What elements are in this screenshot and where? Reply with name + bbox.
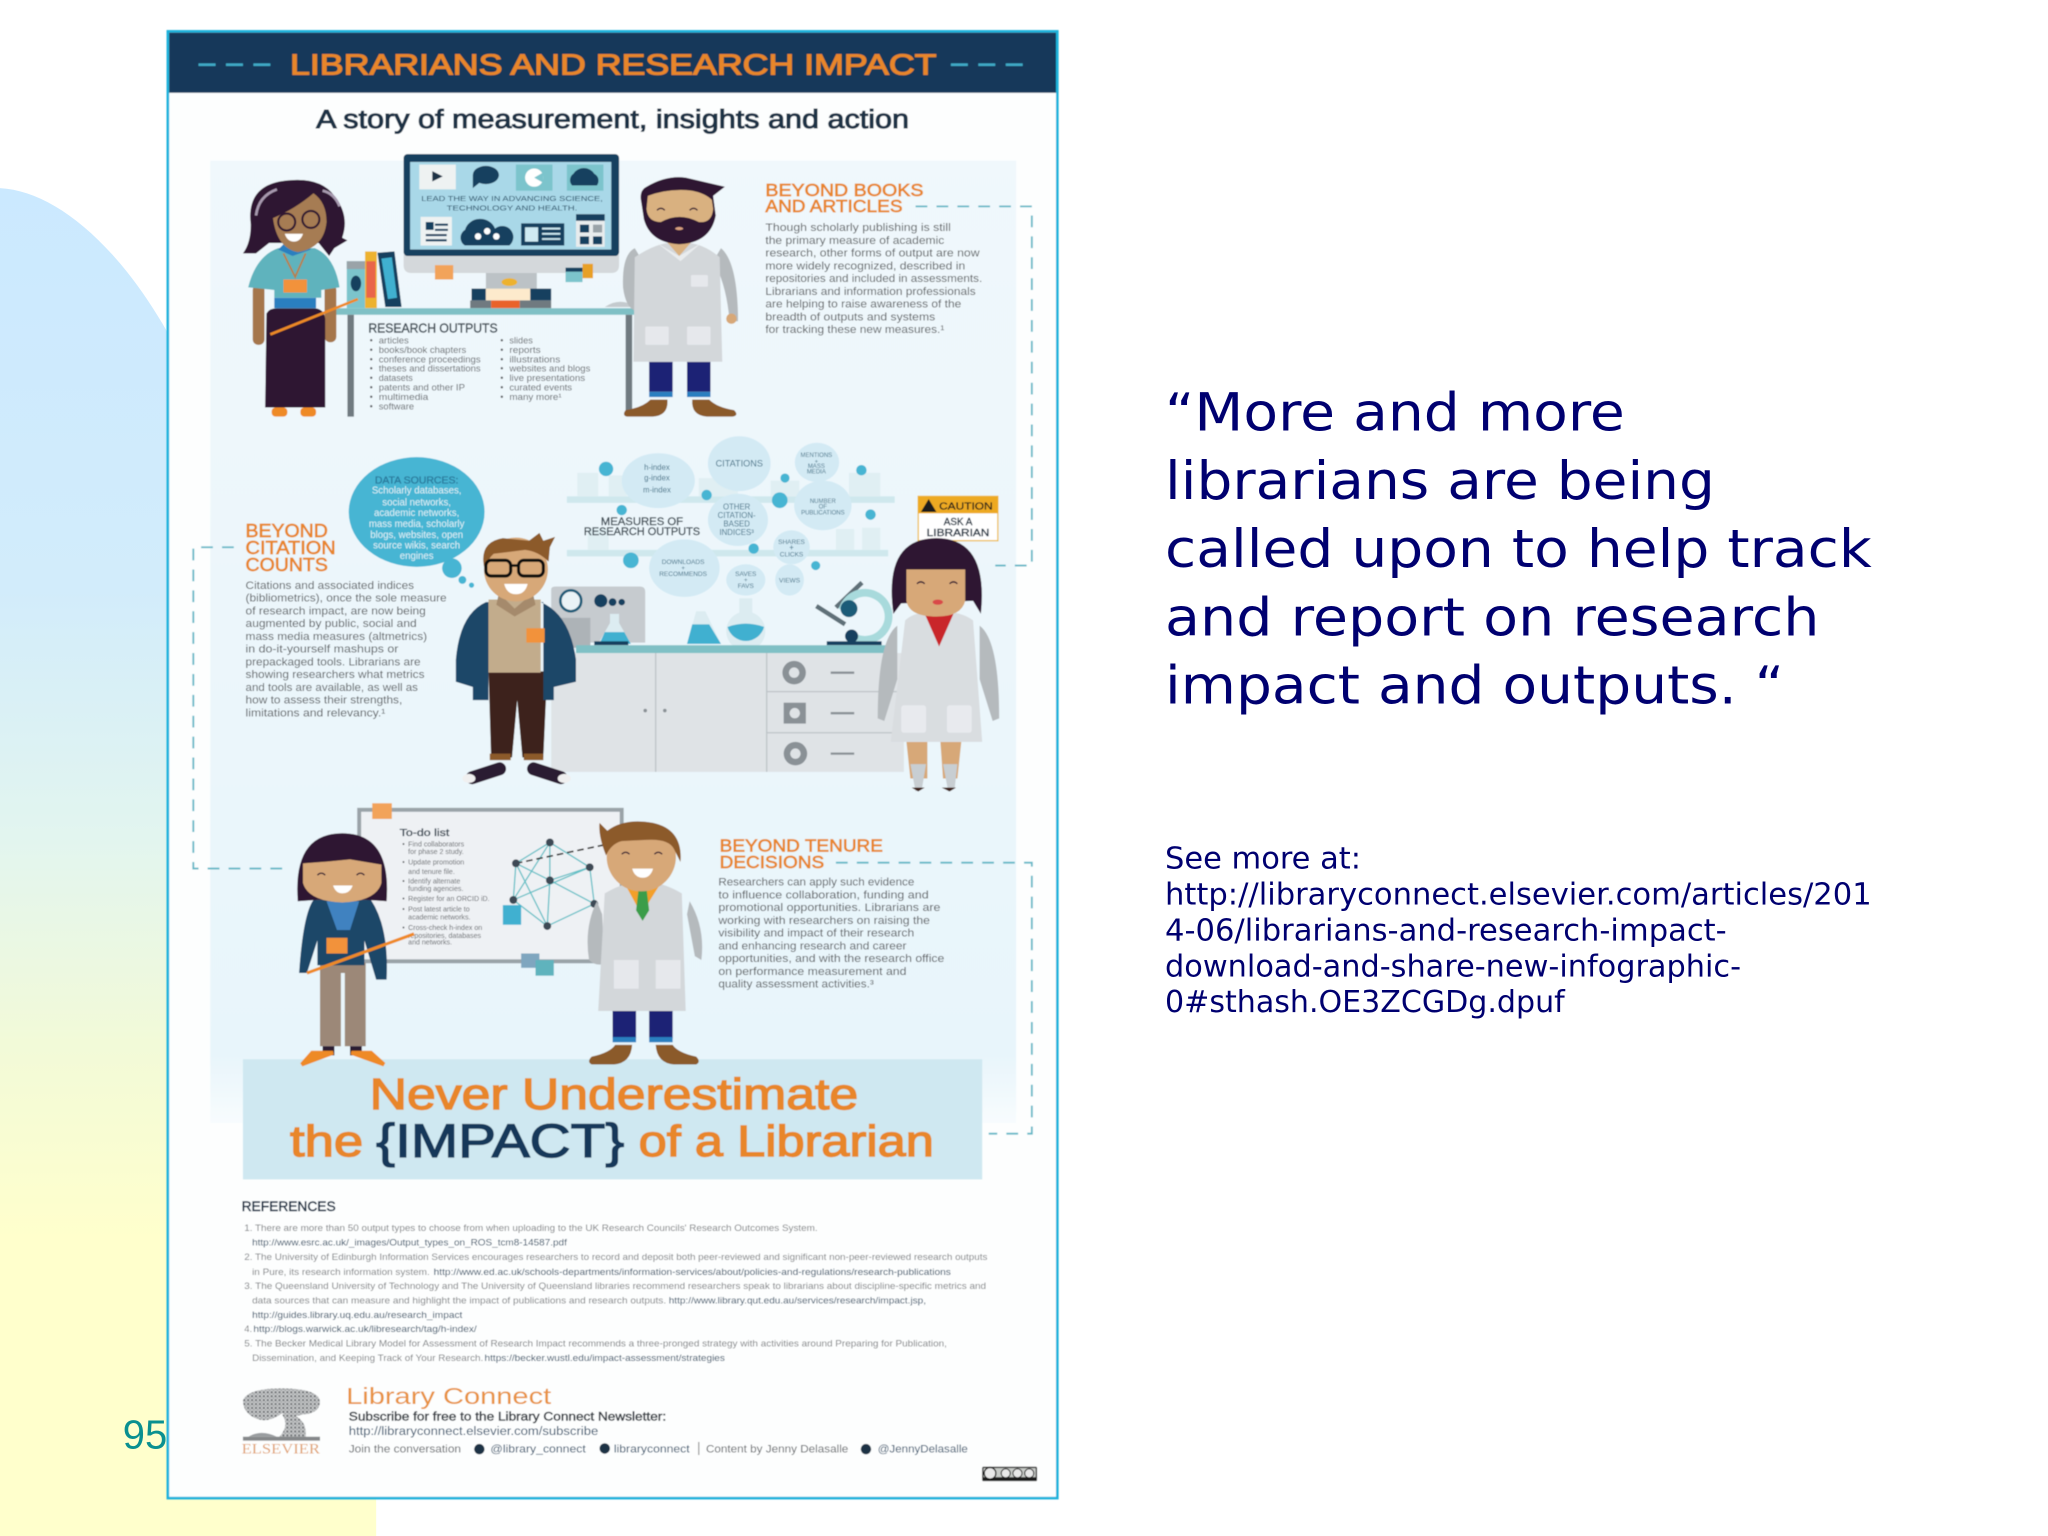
list: research outputs: • [370,354,373,364]
list: research outputs: books/book chapters [379,345,467,355]
banner: never underestimate: of a Librarian [639,1118,934,1166]
shelves with measures of research outputs: + [789,543,794,552]
character: woman with pointer [297,833,414,1064]
source link text [1165,842,1872,1020]
bubble: data sources: mass media, scholarly [369,519,465,530]
footer: library connect: Content by Jenny Delasalle [706,1443,848,1455]
section text: beyond citation counts: how to assess their strengths, [246,694,402,706]
list: research outputs: software [379,401,414,411]
banner: never underestimate [243,1059,982,1179]
footer: elsevier logo: ELSEVIER [242,1442,320,1458]
infographic panel [168,31,1057,1498]
references: http://guides.library.uq.edu.au/research_impact [252,1309,463,1320]
shelves with measures of research outputs: + [744,577,748,584]
dashed connector lines [193,206,1032,1134]
source link text: 4-06/librarians-and-research-impact- [1165,913,1727,948]
whiteboard with to-do list and network: funding agencies. [408,886,463,893]
footer: library connect: Subscribe for free to the Library Connect Newsletter: [349,1410,666,1423]
section text: beyond books and articles: research, other forms of output are now [765,248,981,260]
section text: beyond books and articles: BEYOND BOOKS [765,180,923,200]
footer: library connect: @library_connect [490,1443,586,1455]
list: research outputs: • [370,373,373,383]
references: 1. There are more than 50 output types to choose from when uploading to the UK Research Councils' Research Outcomes System. [244,1222,818,1233]
source link text: 0#sthash.OE3ZCGDg.dpuf [1165,985,1566,1020]
section text: beyond tenure decisions: opportunities, and with the research office [718,953,944,965]
light blue illustration panel [210,161,1016,1123]
footer: library connect: Library Connect [346,1383,552,1409]
shelves with measures of research outputs: + [815,460,819,466]
shelves with measures of research outputs [567,436,895,597]
shelves with measures of research outputs: + [681,565,685,572]
shelves with measures of research outputs: RESEARCH OUTPUTS [584,526,700,538]
cabinet [551,645,904,772]
section text: beyond books and articles: Though scholarly publishing is still [765,222,951,234]
list: research outputs: conference proceedings [379,354,481,364]
list: research outputs: many more¹ [509,392,562,402]
section text: beyond citation counts: showing researchers what metrics [246,669,425,681]
whiteboard with to-do list and network [359,803,622,976]
quote text [1165,383,1872,716]
section text: beyond books and articles: are helping to raise awareness of the [765,299,961,311]
shelves with measures of research outputs: MENTIONS [800,453,832,459]
section text: beyond tenure decisions: visibility and impact of their research [718,927,914,939]
list: research outputs: • [500,373,503,383]
references: http://blogs.warwick.ac.uk/libresearch/tag/h-index/ [253,1323,477,1334]
footer: library connect: libraryconnect [614,1443,690,1455]
references: 3. The Queensland University of Technology and The University of Queensland libraries recommend researchers speak to librarians about discipline-specific metrics and [244,1280,986,1291]
whiteboard with to-do list and network: Cross-check h-index on [408,925,482,932]
caution sign: CAUTION [939,501,993,512]
source link text: download-and-share-new-infographic- [1165,949,1741,984]
list: research outputs: theses and dissertations [379,364,481,374]
section text: beyond citation counts: mass media measures (altmetrics) [246,631,427,643]
list: research outputs: slides [509,336,533,346]
shelves with measures of research outputs: OF [819,505,827,511]
metric bubbles [622,436,852,597]
references: data sources that can measure and highlight the impact of publications and research outputs. [252,1295,666,1306]
bubble: data sources: DATA SOURCES: [375,475,458,486]
shelves with measures of research outputs: DOWNLOADS [662,559,705,566]
whiteboard with to-do list and network: Update promotion [408,860,464,867]
shelves with measures of research outputs: MEDIA [807,469,826,475]
list: research outputs: datasets [379,373,413,383]
shelves with measures of research outputs: BASED [723,519,750,528]
bubble: data sources: social networks, [382,497,451,508]
books on desk [347,251,402,308]
banner: never underestimate: Never Underestimate [370,1071,858,1119]
whiteboard with to-do list and network: Post latest article to [408,907,470,914]
list: research outputs: • [500,336,503,346]
list: research outputs: • [370,392,373,402]
section text: beyond citation counts: of research impact, are now being [246,606,426,618]
shelves with measures of research outputs: VIEWS [779,578,801,585]
section text: beyond citation counts: limitations and relevancy.¹ [246,707,386,719]
banner: never underestimate: {IMPACT} [376,1114,624,1167]
bubble: data sources: academic networks, [374,508,459,519]
section text: beyond tenure decisions: and enhancing research and career [718,941,907,953]
references: 2. The University of Edinburgh Information Services encourages researchers to record and deposit both peer-reviewed and significant non-peer-reviewed research outputs [244,1251,988,1262]
shelves with measures of research outputs: g-index [644,474,670,483]
section text: beyond tenure decisions: working with researchers on raising the [717,915,930,927]
microscope [816,583,889,645]
list: research outputs: • [500,383,503,393]
list: research outputs: • [500,345,503,355]
list: research outputs: • [500,392,503,402]
character: librarian with glasses [243,180,358,417]
section text: beyond citation counts: prepackaged tools. Librarians are [246,656,421,668]
section text: beyond books and articles: repositories and included in assessments. [765,273,982,285]
section text: beyond citation counts: augmented by public, social and [246,618,417,630]
bubble: data sources: source wikis, search [373,541,460,552]
section text: beyond tenure decisions [717,836,944,990]
list: research outputs: patents and other IP [379,383,465,393]
section text: beyond tenure decisions: DECISIONS [720,852,824,872]
list: research outputs: • [370,364,373,374]
subtitle: A story of measurement, insights and action [316,106,909,134]
references: 4. [244,1323,252,1334]
sticky notes on monitor [435,264,593,282]
bubble: data sources: Scholarly databases, [372,486,461,497]
whiteboard with to-do list and network: • [402,907,405,914]
source link text: See more at: [1165,842,1361,877]
list: research outputs: • [500,354,503,364]
shelves with measures of research outputs: OTHER [723,502,751,511]
book stack [470,278,551,308]
whiteboard with to-do list and network: Register for an ORCID iD. [408,896,490,903]
footer: elsevier logo [242,1388,320,1458]
section text: beyond books and articles: Librarians and information professionals [765,286,976,298]
whiteboard with to-do list and network: academic networks. [408,915,470,922]
section text: beyond tenure decisions: Researchers can apply such evidence [718,877,914,889]
shelves with measures of research outputs: SAVES [735,571,757,578]
list: research outputs: • [370,383,373,393]
section text: beyond tenure decisions: BEYOND TENURE [720,836,883,856]
footer: library connect: @JennyDelasalle [878,1443,968,1455]
list: research outputs: • [370,401,373,411]
list: research outputs: reports [509,345,541,355]
footer: library connect [346,1383,968,1455]
section text: beyond books and articles: AND ARTICLES [765,196,903,216]
metric dots [599,462,876,570]
references: REFERENCES [242,1199,336,1214]
section text: beyond citation counts [246,521,447,719]
shelves with measures of research outputs: MEASURES OF [601,516,683,528]
whiteboard with to-do list and network: and networks. [408,939,452,946]
page number: 95 [123,1411,167,1457]
list: research outputs: websites and blogs [508,364,591,374]
header band: LIBRARIANS AND RESEARCH IMPACT [290,49,936,81]
section text: beyond citation counts: BEYOND [246,521,328,541]
quote text: called upon to help track [1165,520,1872,580]
section text: beyond tenure decisions: on performance measurement and [718,966,906,978]
banner: never underestimate: the [290,1118,363,1166]
shelves with measures of research outputs: FAVS [738,583,755,590]
whiteboard with to-do list and network: • [402,896,405,903]
section text: beyond citation counts: in do-it-yourself mashups or [246,643,399,655]
shelves with measures of research outputs: h-index [644,463,670,472]
references: 5. The Becker Medical Library Model for Assessment of Research Impact recommends a three-pronged strategy with activities around Preparing for Publication, [244,1338,947,1349]
shelves with measures of research outputs: CLICKS [780,551,804,558]
caution sign [918,496,998,541]
section text: beyond citation counts: and tools are available, as well as [246,682,418,694]
list: research outputs: • [500,364,503,374]
bubble: data sources: blogs, websites, open [370,530,463,541]
quote text: librarians are being [1165,452,1715,512]
section text: beyond books and articles: the primary measure of academic [765,235,945,247]
bubble: data sources [349,457,485,588]
whiteboard with to-do list and network: for phase 2 study. [408,849,464,856]
source link text: http://libraryconnect.elsevier.com/articles/201 [1165,877,1872,912]
illustration: monitor and desk [336,154,636,417]
section text: beyond tenure decisions: promotional opportunities. Librarians are [718,902,940,914]
shelves with measures of research outputs: RECOMMENDS [659,571,708,578]
character: bearded researcher in lab coat [623,177,738,417]
list: research outputs: illustrations [509,354,561,364]
whiteboard with to-do list and network: Identify alternate [408,879,460,886]
monitor: LEAD THE WAY IN ADVANCING SCIENCE, [421,194,603,203]
shelves with measures of research outputs: CITATIONS [716,458,763,468]
lab machine [551,586,645,648]
shelves with measures of research outputs: SHARES [778,539,806,546]
section text: beyond citation counts: CITATION [246,538,336,558]
desk [336,302,636,417]
list: research outputs: live presentations [509,373,586,383]
shelves with measures of research outputs: INDICES³ [719,528,754,537]
shelves with measures of research outputs: m-index [643,485,671,494]
quote text: “More and more [1165,383,1625,443]
whiteboard with to-do list and network: • [402,879,405,886]
references: http://www.esrc.ac.uk/_images/Output_types_on_ROS_tcm8-14587.pdf [252,1236,567,1247]
whiteboard with to-do list and network: repositories, databases [408,933,482,940]
caution sign: LIBRARIAN [927,528,989,539]
monitor: TECHNOLOGY AND HEALTH. [447,203,577,212]
list: research outputs: • [370,336,373,346]
bubble: data sources: engines [400,551,434,562]
quote text: and report on research [1165,588,1819,648]
list: research outputs: articles [379,336,409,346]
section text: beyond tenure decisions: quality assessment activities.³ [718,978,874,990]
footer: library connect: Join the conversation [349,1443,461,1455]
section text: beyond citation counts: COUNTS [246,555,328,575]
footer: library connect: http://libraryconnect.elsevier.com/subscribe [349,1425,599,1438]
background blob [0,188,376,1536]
section text: beyond books and articles: breadth of outputs and systems [765,312,936,324]
section text: beyond tenure decisions: to influence collaboration, funding and [718,890,929,902]
network diagram [503,839,603,930]
character: man with green tie [588,821,702,1064]
section text: beyond books and articles: more widely recognized, described in [765,261,965,273]
whiteboard with to-do list and network: and tenure file. [408,869,455,876]
references: https://becker.wustl.edu/impact-assessment/strategies [485,1352,725,1363]
shelves with measures of research outputs: MASS [808,464,825,470]
shelves with measures of research outputs: NUMBER [810,499,837,505]
monitor [404,154,619,293]
whiteboard with to-do list and network: Find collaborators [408,841,465,848]
character: lab coat librarian [878,538,999,792]
list: research outputs: • [370,345,373,355]
flasks [687,598,765,651]
list: research outputs: multimedia [379,392,429,402]
header band [169,33,1056,93]
section text: beyond citation counts: (bibliometrics), once the sole measure [246,592,447,604]
section text: beyond books and articles: for tracking these new measures.¹ [765,324,945,336]
creative commons badge [982,1467,1037,1481]
whiteboard with to-do list and network: • [402,841,405,848]
caution sign: ASK A [944,517,973,528]
shelves with measures of research outputs: PUBLICATIONS [801,511,845,517]
references: http://www.library.qut.edu.au/services/research/impact.jsp, [669,1295,926,1306]
references: in Pure, its research information system. [252,1266,430,1277]
whiteboard with to-do list and network: • [402,860,405,867]
section text: beyond citation counts: Citations and associated indices [246,580,414,592]
list: research outputs: RESEARCH OUTPUTS [368,321,498,335]
references: Dissemination, and Keeping Track of Your Research. [252,1352,483,1363]
references: http://www.ed.ac.uk/schools-departments/information-services/about/policies-and-regulations/research-publications [434,1266,951,1277]
whiteboard with to-do list and network: To-do list [400,828,449,839]
quote text: impact and outputs. “ [1165,656,1784,716]
references [242,1199,988,1363]
character: researcher with glasses [456,533,576,786]
whiteboard with to-do list and network: • [402,925,405,932]
section text: beyond books and articles [765,180,982,336]
list: research outputs: curated events [509,383,573,393]
shelves with measures of research outputs: CITATION- [718,511,756,520]
list: research outputs [368,321,591,411]
lab bench with equipment [551,583,904,772]
